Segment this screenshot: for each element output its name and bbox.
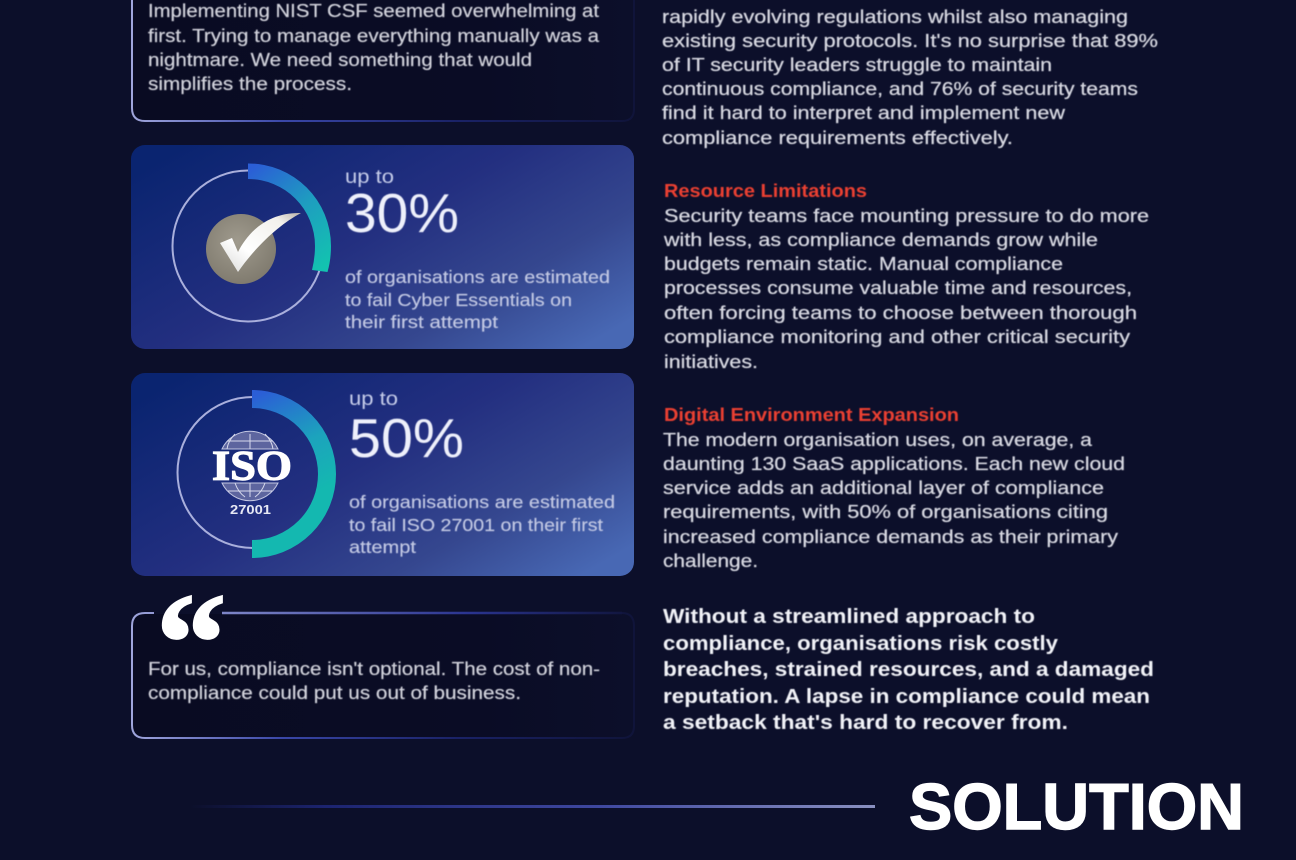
stat text: 50%: attempt — [349, 537, 416, 557]
text block: Resource Limitations: initiatives. — [664, 351, 758, 372]
section divider line — [190, 805, 875, 808]
icon: Cyber Essentials check seal — [206, 213, 301, 284]
heading: Digital Environment Expansion: Digital Environment Expansion — [664, 404, 959, 425]
stat text: 30%: their first attempt — [345, 312, 498, 332]
panel: Cyber Essentials stat card — [131, 145, 634, 349]
icon: ISO 27001 logo — [212, 431, 292, 517]
text block: Digital Environment Expansion: The modern organisation uses, on average, a — [663, 429, 1093, 450]
text block: evolving regulations: find it hard to interpret and implement new — [662, 102, 1066, 123]
heading: SOLUTION: SOLUTION — [909, 770, 1244, 843]
stat text: 50%: of organisations are estimated — [349, 492, 615, 512]
text block: evolving regulations: existing security protocols. It's no surprise that 89% — [662, 30, 1158, 51]
text block: Resource Limitations: budgets remain static. Manual compliance — [664, 253, 1063, 274]
quote text: cost of non-compliance: For us, compliance isn't optional. The cost of non- — [148, 659, 600, 679]
panel: ISO 27001 stat card — [131, 373, 634, 576]
quote text: NIST CSF: first. Trying to manage everything manually was a — [148, 26, 600, 46]
text block: Digital Environment Expansion: requirements, with 50% of organisations citing — [663, 501, 1108, 522]
text block: evolving regulations — [662, 6, 1158, 148]
stat text: 30% — [345, 167, 610, 332]
stat text: 30%: up to — [345, 167, 394, 188]
quote text: NIST CSF — [148, 1, 600, 94]
text block: evolving regulations: rapidly evolving regulations whilst also managing — [662, 6, 1128, 27]
stat text: 50%: 50% — [349, 407, 464, 469]
icon: quotation mark: “ — [156, 565, 226, 721]
quote text: NIST CSF: Implementing NIST CSF seemed overwhelming at — [148, 1, 599, 21]
heading: Resource Limitations: Resource Limitations — [664, 180, 867, 201]
text block: Digital Environment Expansion: service adds an additional layer of compliance — [663, 477, 1104, 498]
panel: bottom quote — [131, 565, 634, 738]
ring chart: 50% — [178, 397, 328, 549]
text block: Digital Environment Expansion: daunting 130 SaaS applications. Each new cloud — [663, 453, 1125, 474]
quote text: cost of non-compliance: compliance could put us out of business. — [148, 683, 521, 703]
ring chart: 30% — [172, 163, 331, 322]
text block: evolving regulations: continuous compliance, and 76% of security teams — [662, 78, 1138, 99]
stat text: 30%: of organisations are estimated — [345, 267, 610, 287]
text block: Resource Limitations: often forcing teams to choose between thorough — [664, 302, 1137, 323]
text block: Resource Limitations — [663, 180, 1149, 372]
text block: conclusion: Without a streamlined approach to — [663, 606, 1035, 628]
stat text: 50%: to fail ISO 27001 on their first — [349, 515, 603, 535]
text block: Resource Limitations: processes consume valuable time and resources, — [664, 277, 1132, 298]
stat text: 30%: 30% — [345, 182, 459, 244]
quote text: NIST CSF: nightmare. We need something that would — [148, 50, 532, 70]
text block: conclusion — [663, 606, 1154, 734]
icon: ISO 27001 logo: ISO — [212, 444, 292, 490]
text block: conclusion: reputation. A lapse in compliance could mean — [663, 686, 1150, 708]
quote text: NIST CSF: simplifies the process. — [148, 74, 352, 94]
icon: ISO 27001 logo: 27001 — [230, 502, 271, 517]
text block: evolving regulations: compliance requirements effectively. — [662, 127, 1013, 148]
text block: Digital Environment Expansion: challenge. — [663, 550, 758, 571]
stat text: 50%: up to — [349, 389, 398, 410]
text block: Digital Environment Expansion: increased compliance demands as their primary — [663, 526, 1119, 547]
text block: conclusion: a setback that's hard to recover from. — [663, 712, 1068, 734]
stat text: 30%: to fail Cyber Essentials on — [345, 290, 572, 310]
quote text: cost of non-compliance — [148, 659, 600, 703]
text block: conclusion: breaches, strained resources, and a damaged — [663, 659, 1154, 681]
text block: conclusion: compliance, organisations risk costly — [663, 633, 1059, 655]
stat text: 50% — [349, 389, 615, 557]
text block: Resource Limitations: compliance monitoring and other critical security — [664, 326, 1131, 347]
text block: evolving regulations: of IT security leaders struggle to maintain — [662, 54, 1052, 75]
text block: Resource Limitations: with less, as compliance demands grow while — [663, 229, 1098, 250]
text block: Resource Limitations: Security teams face mounting pressure to do more — [664, 205, 1149, 226]
panel: top quote — [131, 0, 634, 121]
text block: Digital Environment Expansion — [663, 404, 1125, 571]
